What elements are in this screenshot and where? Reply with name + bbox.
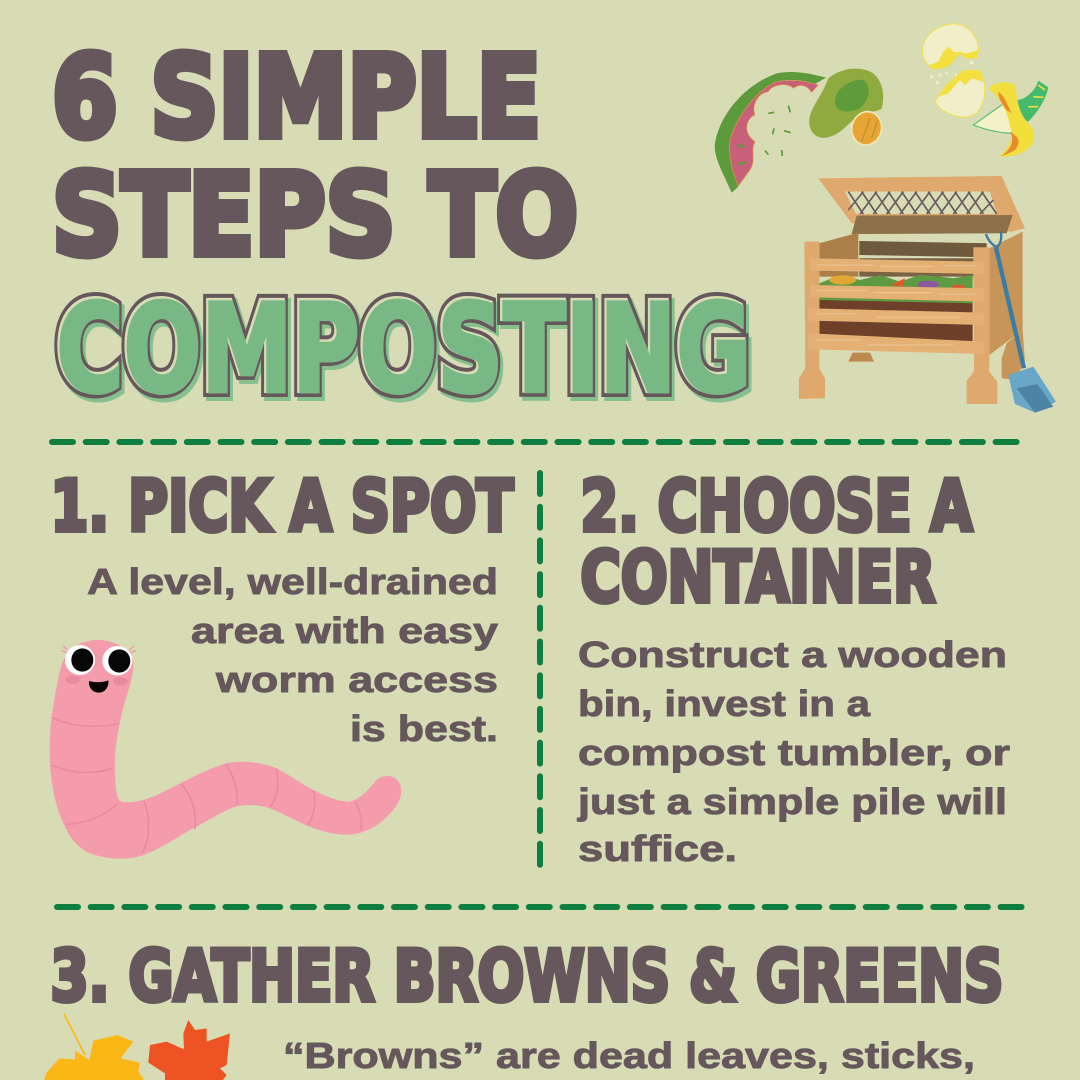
step 1 body: area with easy — [191, 610, 498, 651]
step 2 heading: 2. CHOOSE A — [580, 466, 972, 548]
title: composting outlined word: COMPOSTING — [58, 281, 753, 423]
title — [52, 33, 753, 423]
divider — [52, 439, 1022, 445]
slats — [808, 258, 984, 354]
icon: autumn leaves — [43, 1014, 230, 1080]
step 1 body: A level, well-drained — [87, 561, 498, 602]
icon: pink worm — [50, 640, 401, 859]
bin lid frame — [818, 176, 1025, 232]
shovel — [986, 232, 1056, 413]
divider — [57, 904, 1027, 910]
step 2 body: Construct a wooden — [578, 634, 1007, 675]
step 2 body: just a simple pile will — [577, 781, 1007, 822]
step 2 heading: CONTAINER — [580, 536, 936, 618]
title: composting outlined word: COMPOSTING — [55, 277, 750, 419]
title: composting outlined word: COMPOSTING — [56, 278, 752, 420]
step 2 body: compost tumbler, or — [578, 732, 1010, 773]
icon: eggshells — [923, 24, 985, 117]
back feet — [848, 353, 874, 362]
divider — [537, 473, 543, 866]
title: composting outlined word: COMPOSTING — [55, 277, 750, 419]
posts — [799, 242, 825, 399]
step 2 body — [577, 634, 1010, 869]
lid lattice — [845, 192, 997, 214]
step 2 body: bin, invest in a — [578, 683, 871, 724]
step 1 body: is best. — [350, 708, 498, 749]
step 1 heading: 1. PICK A SPOT — [50, 466, 514, 548]
icon: compost bin with shovel — [799, 176, 1056, 413]
step 2 heading — [580, 466, 972, 618]
icon: squash peel — [973, 81, 1048, 157]
step 3 body: “Browns” are dead leaves, sticks, — [283, 1035, 975, 1076]
step 1 body: worm access — [215, 659, 498, 700]
title: STEPS TO — [52, 151, 578, 281]
bin side panel — [989, 232, 1023, 355]
icon: avocado — [809, 69, 886, 149]
step 1 body — [87, 561, 498, 749]
title: 6 SIMPLE — [52, 33, 541, 163]
icon: watermelon rind — [715, 72, 826, 193]
compost layers — [819, 297, 973, 342]
step 2 body: suffice. — [578, 828, 737, 869]
